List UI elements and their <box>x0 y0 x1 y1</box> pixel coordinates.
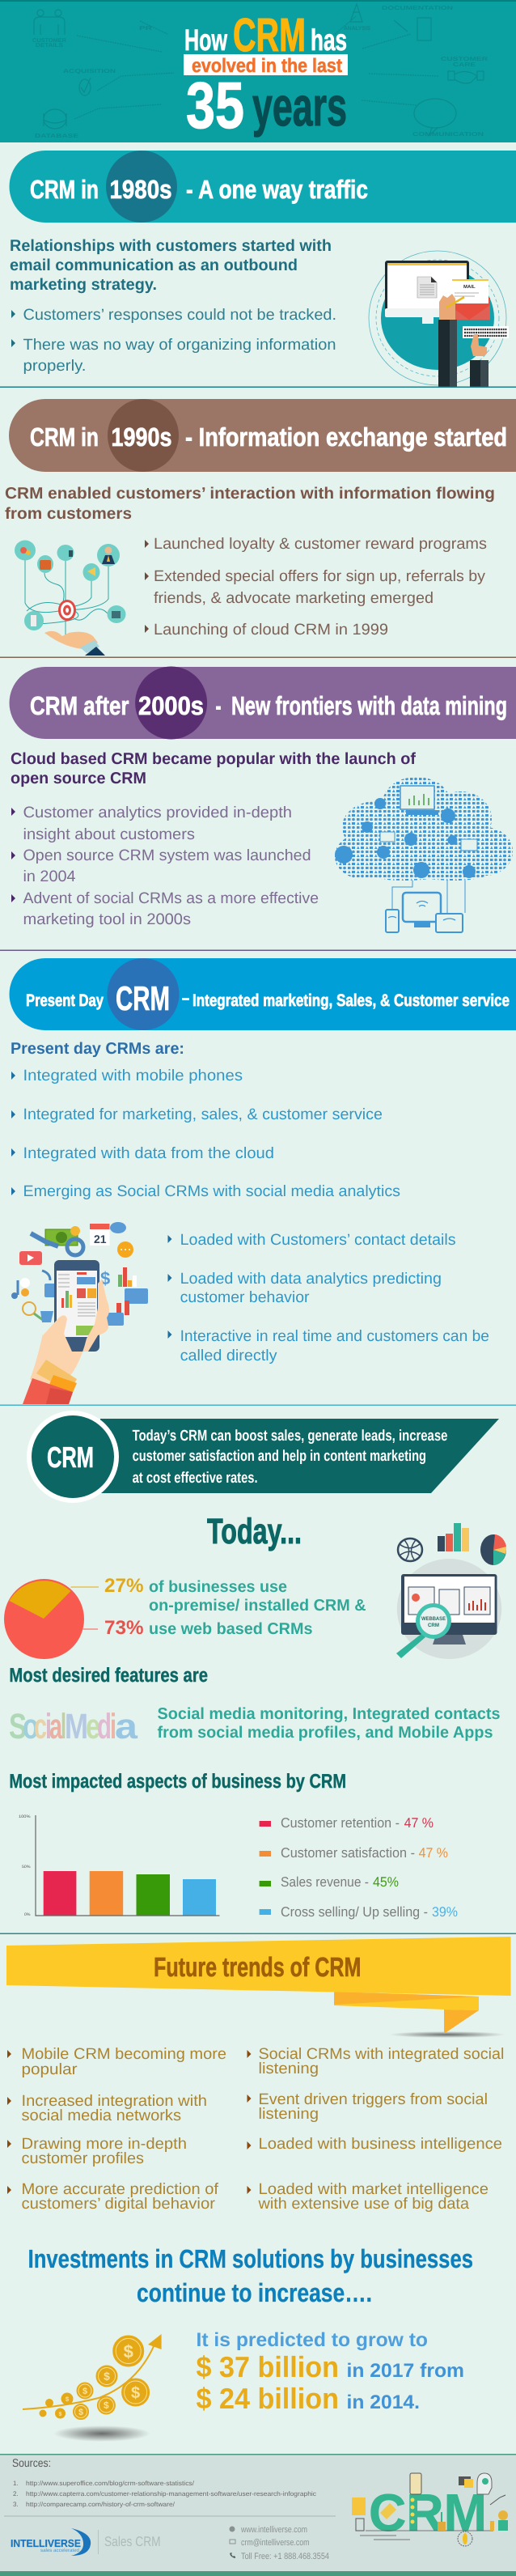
panel: CRM in 1990s <box>5 399 516 656</box>
panel: CRM after 2000s <box>10 667 516 932</box>
heading: desired features: Most desired features are <box>9 1665 208 1687</box>
icon: rising coins: $ <box>59 2411 62 2417</box>
divider: 1980s <box>0 387 516 388</box>
list: sources: 2. <box>13 2490 19 2497</box>
logo: social media wordmark: a <box>49 1707 62 1746</box>
badge: CRM circle <box>27 1411 119 1503</box>
header watermark labels: PR <box>139 26 152 32</box>
icon: hand with smartphone <box>11 1222 148 1404</box>
lead text: 1980s <box>10 237 332 294</box>
callout text: at cost effective rates. <box>133 1470 258 1487</box>
bullets: future trends right <box>247 2046 504 2213</box>
stats: deployment: 73% <box>104 1617 144 1639</box>
banner: 2000s <box>10 667 516 740</box>
bullets: 1980s: There was no way of organizing information <box>23 337 336 354</box>
stats: deployment: 27% <box>104 1575 144 1597</box>
logo: social media wordmark: a <box>115 1707 138 1746</box>
bullets: present day list <box>11 1067 400 1200</box>
bullets: 2000s: Open source CRM system was launched <box>23 847 311 864</box>
stats: deployment: on-premise/ installed CRM & <box>149 1597 366 1615</box>
banner: present day: CRM <box>116 979 170 1017</box>
title: years <box>252 76 347 138</box>
bullets: present day features: called directly <box>180 1347 277 1364</box>
banner: 1980s: - A one way traffic <box>186 175 368 204</box>
logo: CRM illustration <box>352 2473 508 2546</box>
callout text <box>133 1428 447 1487</box>
title: 35 <box>186 70 244 142</box>
panel: today <box>4 1512 506 1920</box>
bullets: present day list: Integrated with data from the cloud <box>23 1145 274 1162</box>
bullets: future trends right: Loaded with business intelligence <box>259 2136 502 2153</box>
badge: CRM circle: CRM <box>47 1441 94 1474</box>
title <box>184 9 348 142</box>
lead text: present day: Present day CRMs are: <box>11 1040 184 1058</box>
legend: impacted aspects: 45% <box>373 1874 399 1890</box>
bar chart: impacted aspects <box>19 1814 220 1917</box>
logo: Intelliverse: Sales CRM <box>104 2534 161 2549</box>
header watermark labels: COMMUNICATION <box>412 132 484 138</box>
title: evolved in the last <box>192 55 342 77</box>
panel: CRM in 1980s <box>10 151 516 387</box>
bar chart: impacted aspects: 100% <box>19 1814 31 1819</box>
header watermark labels: ANALYSIS <box>344 26 370 32</box>
bullets: 1990s <box>145 536 487 639</box>
bar chart: impacted aspects: 50% <box>22 1865 31 1869</box>
list: sources: 3. <box>13 2501 19 2508</box>
banner: 1990s: 1990s <box>112 422 171 452</box>
bullets: future trends right: listening <box>259 2106 319 2123</box>
header watermark labels: DATABASE <box>35 134 78 139</box>
header panel <box>0 0 516 142</box>
bullets: future trends right: with extensive use of big data <box>257 2196 469 2213</box>
text: desired features <box>157 1705 500 1742</box>
stats: deployment <box>104 1575 366 1639</box>
icon: web based CRM monitor <box>396 1523 506 1659</box>
bullets: present day list: Emerging as Social CRMs with social media analytics <box>23 1183 400 1200</box>
icon: rising coins: $ <box>124 2341 133 2362</box>
bullets: present day features <box>168 1232 489 1364</box>
logo: Intelliverse: INTELLIVERSE <box>11 2537 81 2549</box>
callout ribbon <box>100 1419 499 1493</box>
legend: impacted aspects: 47 % <box>404 1815 434 1831</box>
logo: social media wordmark: S <box>9 1707 27 1746</box>
lead text: 1980s: Relationships with customers started with <box>10 237 332 255</box>
bullets: 1980s: Customers’ responses could not be tracked. <box>23 307 336 324</box>
list: sources <box>13 2480 316 2508</box>
legend: impacted aspects: Customer satisfaction - <box>281 1845 415 1861</box>
header watermark labels: DOCUMENTATION <box>382 6 453 11</box>
banner: 1990s: CRM in <box>30 422 99 452</box>
header watermark labels <box>32 6 488 139</box>
icon: hand with smartphone: 21 <box>94 1233 107 1246</box>
text: desired features: Social media monitoring, Integrated contacts <box>157 1705 500 1723</box>
bullets: present day features: Interactive in real time and customers can be <box>180 1328 489 1345</box>
bar chart: impacted aspects: 0% <box>24 1912 31 1917</box>
panel: today's CRM callout <box>27 1411 499 1503</box>
logo: Intelliverse: sales accelerated <box>40 2548 79 2553</box>
contact details: Toll Free: +1 888.468.3554 <box>241 2552 329 2561</box>
list: sources: http://www.superoffice.com/blog/crm-software-statistics/ <box>26 2480 195 2487</box>
heading: investments <box>28 2244 473 2307</box>
panel: present day CRM <box>10 958 516 1404</box>
lead text: 1990s: CRM enabled customers’ interaction with information flowing <box>5 485 495 503</box>
title: CRM <box>233 9 306 62</box>
list: sources: http://comparecamp.com/history-of-crm-software/ <box>26 2501 176 2508</box>
bullets: 2000s: insight about customers <box>23 826 195 843</box>
banner: 1980s: 1980s <box>110 175 171 204</box>
bullets: present day features: Loaded with data analytics predicting <box>180 1271 442 1288</box>
legend: impacted aspects: Sales revenue - <box>281 1874 369 1890</box>
lead text: 1980s: marketing strategy. <box>10 276 157 294</box>
text: market growth: It is predicted to grow to <box>196 2329 428 2351</box>
bullets: 2000s <box>11 804 319 928</box>
header watermark labels: CUSTOMER <box>441 57 488 62</box>
legend: impacted aspects: 39% <box>432 1904 458 1920</box>
bullets: 1980s: properly. <box>23 358 86 375</box>
bullets: present day list: Integrated with mobile phones <box>23 1067 243 1084</box>
list: sources: 1. <box>13 2480 19 2487</box>
lead text: 2000s <box>11 750 416 787</box>
text: market growth: in 2017 from <box>346 2360 464 2382</box>
heading: investments: continue to increase…. <box>137 2278 372 2307</box>
lead text: 1990s <box>5 485 495 523</box>
banner: 1980s: CRM in <box>30 175 99 204</box>
icon: cloud of devices <box>335 777 514 932</box>
callout text: customer satisfaction and help in content marketing <box>133 1448 426 1465</box>
logo: social media wordmark: i <box>45 1707 52 1746</box>
logo: CRM illustration: CRM <box>369 2483 487 2542</box>
icon: rising coins: $ <box>104 2400 109 2411</box>
bullets: future trends right: Social CRMs with integrated social <box>259 2046 504 2063</box>
bullets: future trends left: Drawing more in-depth <box>21 2136 187 2153</box>
contact details: www.intelliverse.com <box>240 2525 307 2535</box>
banner: 1980s <box>10 151 516 223</box>
bullets: 2000s: Customer analytics provided in-depth <box>23 804 292 821</box>
icon: rising coins: $ <box>78 2408 83 2417</box>
pie chart: CRM deployment <box>4 1579 99 1659</box>
bullets: future trends right: Event driven triggers from social <box>259 2091 488 2108</box>
bullets: future trends left: Increased integration with <box>21 2093 207 2110</box>
panel: footer <box>0 2454 516 2576</box>
logo: social media wordmark: c <box>34 1707 47 1746</box>
header watermark labels: DETAILS <box>36 43 63 49</box>
banner: 2000s: - <box>215 691 222 720</box>
logo: social media wordmark: i <box>110 1707 116 1746</box>
divider: present day <box>0 1405 516 1406</box>
text: market growth <box>196 2329 464 2415</box>
icon: rising coins: $ <box>104 2370 110 2383</box>
lead text: 1980s: email communication as an outbound <box>10 257 298 274</box>
header watermark labels: CUSTOMER <box>32 38 66 44</box>
logo: social media wordmark: o <box>23 1707 39 1746</box>
lead text: 2000s: open source CRM <box>11 770 146 787</box>
bullets: future trends left: Mobile CRM becoming more <box>21 2046 226 2063</box>
text: market growth: $ 37 billion <box>196 2350 339 2383</box>
divider: today <box>0 1933 516 1934</box>
heading: today: Today... <box>207 1512 302 1551</box>
bullets: future trends left: customer profiles <box>21 2150 144 2167</box>
bullets: 1980s <box>11 307 336 375</box>
ribbon: future trends: Future trends of CRM <box>154 1953 361 1983</box>
title: has <box>311 23 347 57</box>
bullets: present day features: Loaded with Customers’ contact details <box>180 1232 456 1249</box>
logo: social media wordmark: d <box>97 1707 112 1746</box>
heading: sources: Sources: <box>12 2456 51 2469</box>
bullets: future trends right: Loaded with market intelligence <box>259 2181 489 2198</box>
text: desired features: from social media profiles, and Mobile Apps <box>157 1724 493 1742</box>
icon: rising coins <box>23 2334 162 2442</box>
legend: impacted aspects: 47 % <box>419 1845 448 1861</box>
panel: future trends <box>6 1937 511 2213</box>
legend: impacted aspects: Cross selling/ Up selling - <box>281 1904 428 1920</box>
divider: 1990s <box>0 657 516 658</box>
logo: social media wordmark: l <box>61 1707 66 1746</box>
header watermark labels: ACQUISITION <box>63 69 116 74</box>
stats: deployment: use web based CRMs <box>149 1620 312 1638</box>
bullets: 1990s: Extended special offers for sign up, referrals by <box>154 568 485 585</box>
bullets: present day features: customer behavior <box>180 1289 310 1306</box>
divider: 2000s <box>0 950 516 951</box>
bullets: future trends left <box>7 2046 226 2213</box>
icon: hand with smartphone: $ <box>100 1268 110 1288</box>
title: How <box>184 23 227 57</box>
banner: present day: Present Day <box>26 991 104 1010</box>
stats: deployment: of businesses use <box>149 1578 287 1596</box>
icon: rising coins: $ <box>66 2396 70 2403</box>
logo: social media wordmark <box>9 1707 138 1746</box>
bullets: future trends left: More accurate prediction of <box>21 2181 219 2198</box>
logo: social media wordmark: e <box>86 1707 100 1746</box>
contact details: crm@intelliverse.com <box>241 2538 309 2548</box>
banner: 2000s: 2000s <box>138 691 204 720</box>
bullets: future trends left: customers’ digital behavior <box>21 2196 216 2213</box>
text: market growth: $ 24 billion <box>196 2382 339 2415</box>
header watermark icons <box>34 4 484 135</box>
legend: impacted aspects <box>260 1815 458 1920</box>
bullets: future trends right: listening <box>259 2060 319 2077</box>
icon: computer and mail: MAIL <box>463 284 476 290</box>
contact details <box>230 2525 329 2561</box>
banner: 2000s: CRM after <box>30 691 129 720</box>
bullets: present day list: Integrated for marketing, sales, & customer service <box>23 1106 383 1123</box>
logo: social media wordmark: M <box>65 1707 88 1746</box>
bullets: 1990s: Launched loyalty & customer reward programs <box>154 536 487 553</box>
legend: impacted aspects: Customer retention - <box>281 1815 400 1831</box>
bullets: future trends left: social media networks <box>21 2107 181 2124</box>
bullets: 2000s: Advent of social CRMs as a more effective <box>23 890 319 907</box>
lead text: 1990s: from customers <box>5 505 132 523</box>
bullets: 1990s: friends, & advocate marketing emerged <box>154 590 434 607</box>
icon: web based CRM monitor: WEBBASE <box>421 1616 446 1622</box>
banner: 1990s <box>9 399 516 472</box>
logo: Intelliverse <box>11 2528 161 2556</box>
bullets: future trends left: popular <box>21 2061 78 2078</box>
icon: rising coins: $ <box>82 2387 87 2396</box>
bullets: 2000s: in 2004 <box>23 868 76 885</box>
icon: target network in hand <box>15 541 126 656</box>
icon: rising coins: $ <box>131 2384 140 2402</box>
bullets: 1990s: Launching of cloud CRM in 1999 <box>154 622 388 639</box>
icon: web based CRM monitor: CRM <box>428 1623 439 1628</box>
ribbon: future trends <box>6 1937 511 2038</box>
lead text: 2000s: Cloud based CRM became popular with the launch of <box>11 750 416 768</box>
banner: present day <box>10 958 516 1030</box>
heading: impacted aspects: Most impacted aspects of business by CRM <box>9 1771 346 1793</box>
list: sources: http://www.capterra.com/customer-relationship-management-software/user-research-infographic <box>26 2490 316 2497</box>
text: market growth: in 2014. <box>346 2391 420 2413</box>
panel: investments <box>23 2244 473 2442</box>
icon: computer and mail <box>369 251 509 387</box>
bullets: 2000s: marketing tool in 2000s <box>23 911 191 928</box>
header watermark labels: CARE <box>453 62 476 68</box>
